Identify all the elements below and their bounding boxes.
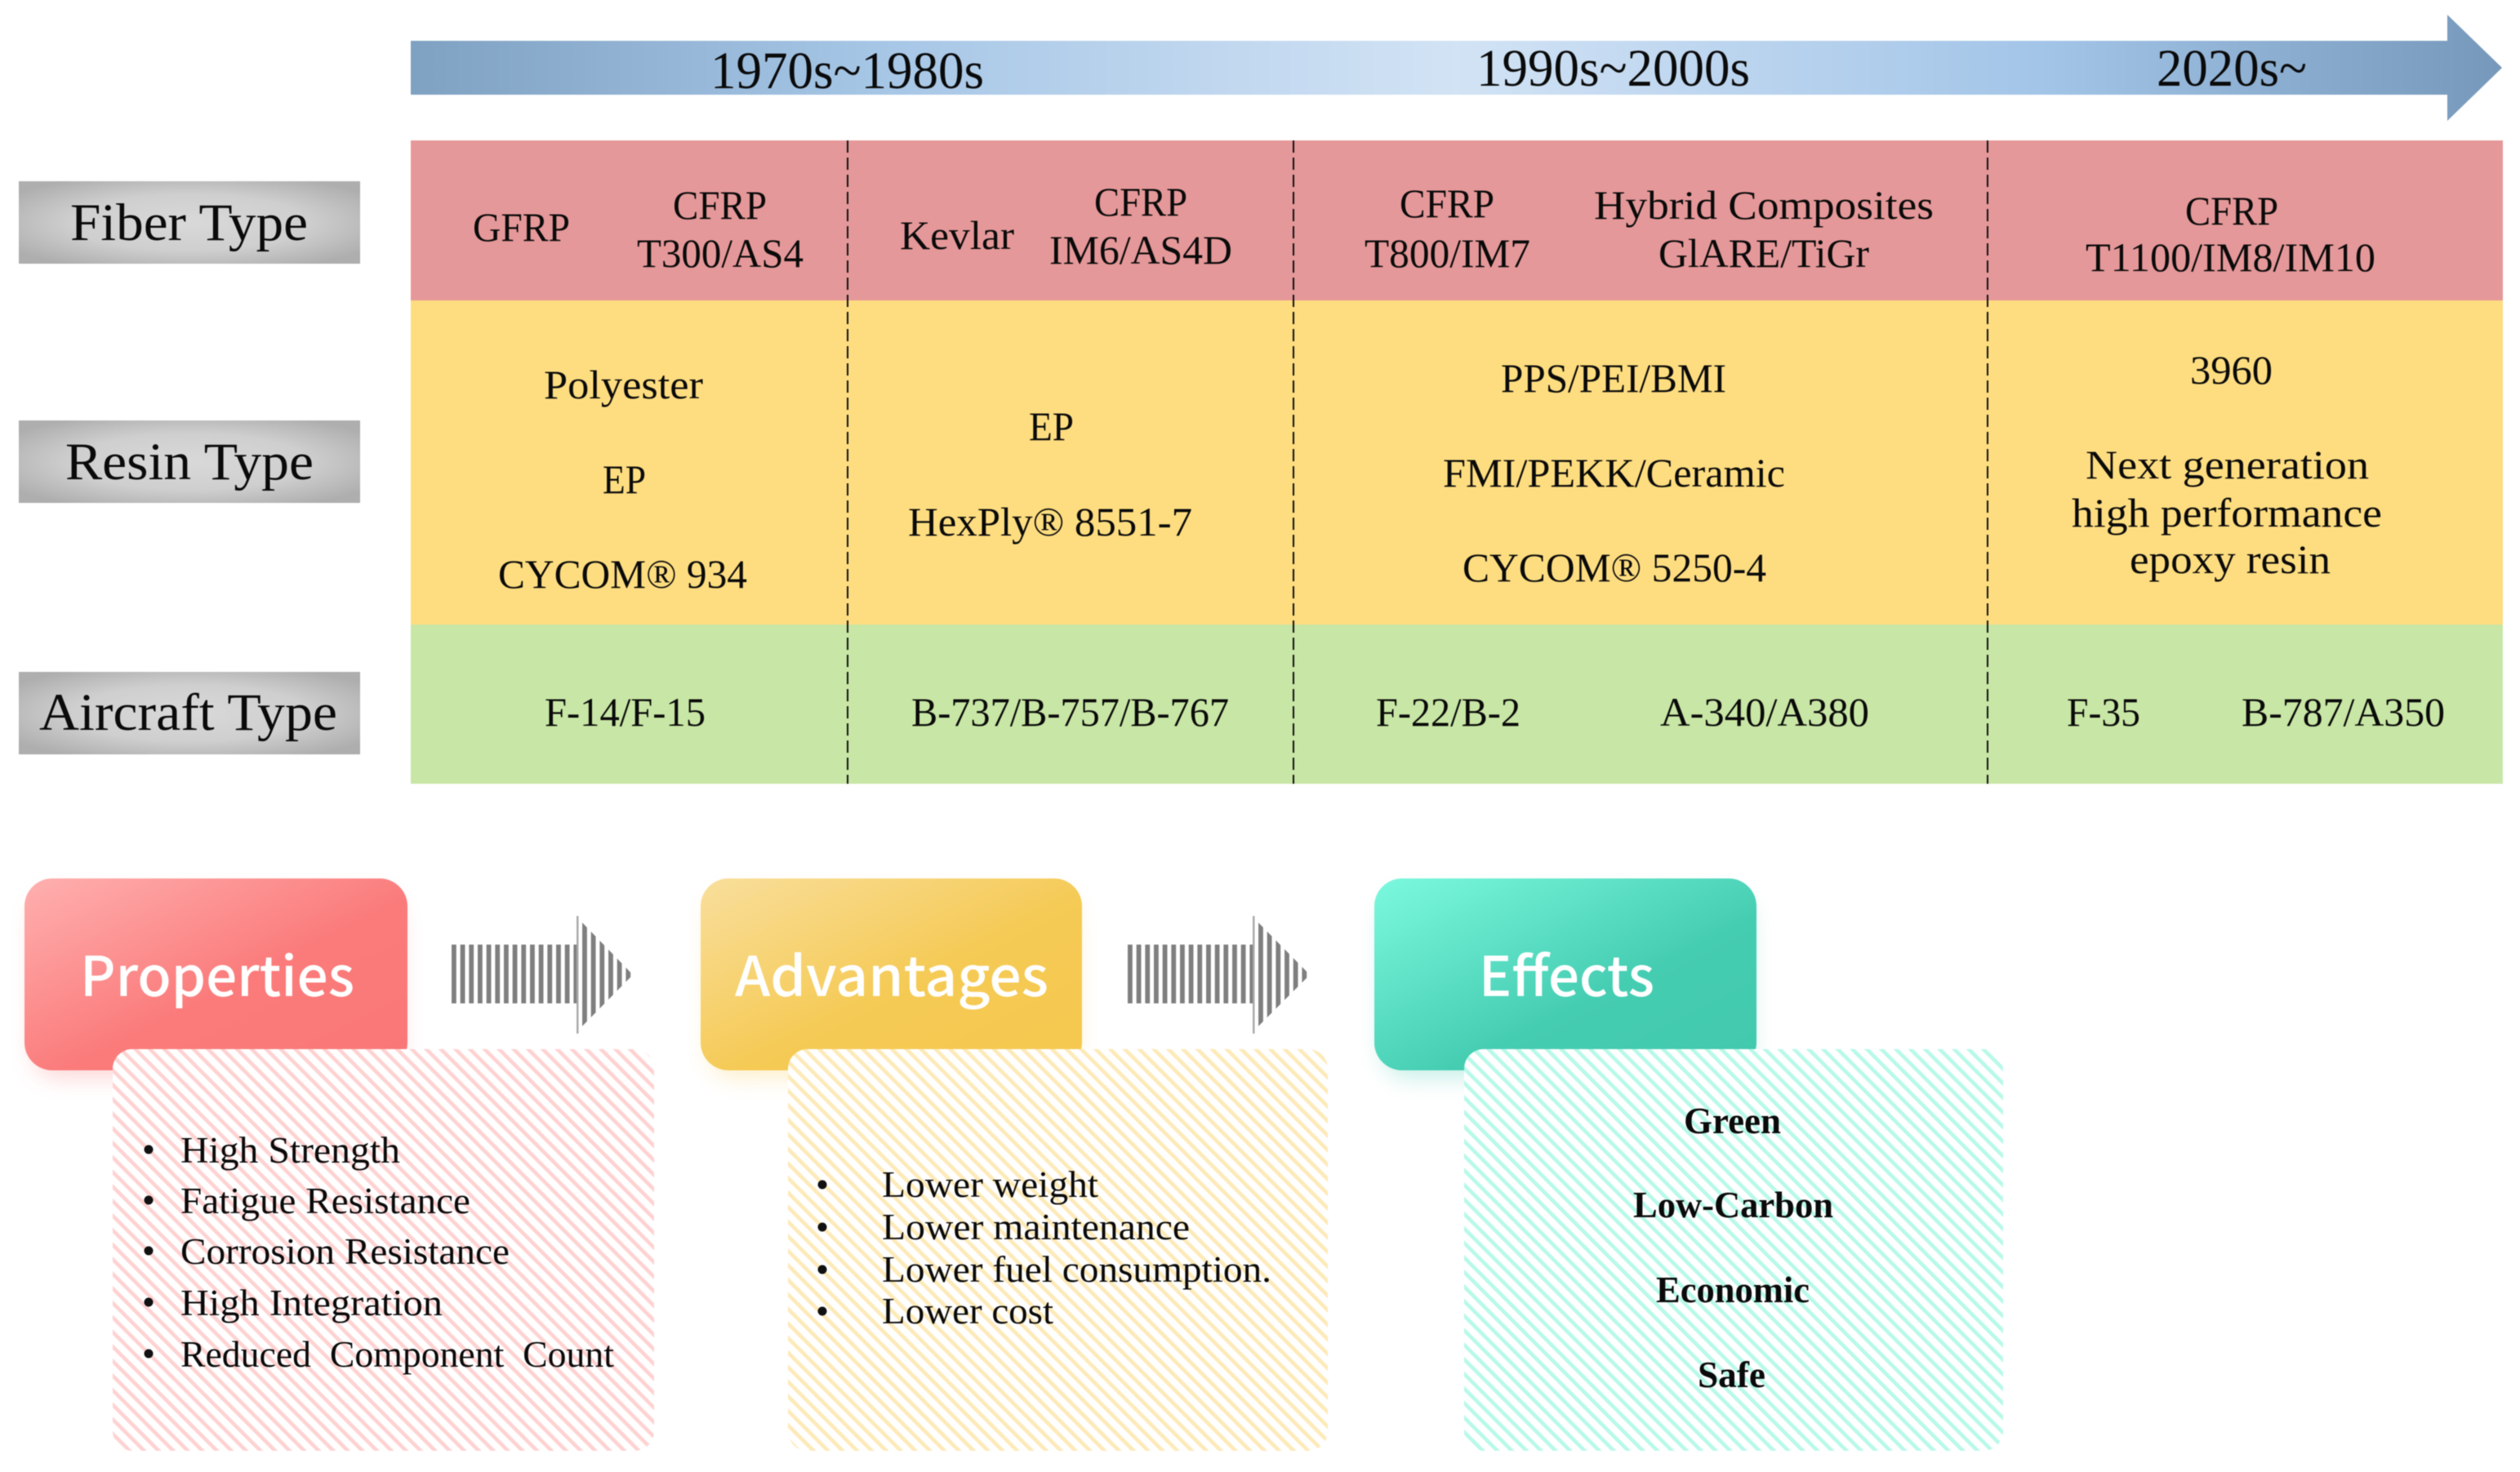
table row: resin type (411, 300, 2503, 625)
fiber entries 1990s~2000s: Hybrid Composites (1594, 182, 1934, 228)
period label: 2020s~: 2020s~ (2157, 39, 2307, 98)
advantages list panel: Lower weight (882, 1164, 1099, 1205)
resin entries 2020s (2072, 347, 2382, 582)
effects heading: Effects (1479, 933, 1654, 1012)
resin entries 1970s: CYCOM® 934 (498, 551, 747, 597)
advantages heading: Advantages (735, 933, 1049, 1012)
fiber entries 2020s: CFRP (2185, 188, 2278, 233)
advantages list panel: Lower fuel consumption. (882, 1249, 1271, 1290)
period label: 1990s~2000s: 1990s~2000s (1476, 39, 1750, 98)
resin entries 1980s (908, 403, 1192, 545)
properties list panel (113, 1049, 654, 1451)
fiber entries 1990s~2000s: GlARE/TiGr (1658, 230, 1869, 276)
row label: Fiber Type: Fiber Type (70, 193, 308, 252)
table row: aircraft type: B-737/B-757/B-767 (911, 689, 1229, 735)
resin entries 1970s: EP (603, 456, 646, 502)
fiber entries 1970s~1980s: GFRP (473, 204, 570, 250)
effects list panel: Economic (1656, 1270, 1810, 1310)
properties list panel: Reduced Component Count (180, 1334, 614, 1375)
resin entries 1990s~2000s: PPS/PEI/BMI (1501, 355, 1726, 401)
fiber entries 1970s~1980s: Kevlar (900, 212, 1014, 258)
row label: Fiber Type (19, 181, 360, 264)
fiber entries 1970s~1980s: IM6/AS4D (1049, 227, 1232, 273)
table row: aircraft type: A-340/A380 (1660, 689, 1869, 735)
resin entries 2020s: 3960 (2190, 347, 2273, 393)
fiber entries 1990s~2000s: CFRP (1400, 180, 1494, 226)
timeline arrow (411, 15, 2502, 121)
resin entries 2020s: epoxy resin (2130, 536, 2331, 582)
advantages card (701, 878, 1328, 1451)
row label: Aircraft Type: Aircraft Type (39, 683, 337, 742)
fiber entries 1970s~1980s (473, 179, 1232, 276)
resin entries 1970s: Polyester (544, 362, 703, 407)
effects list panel: Green (1684, 1101, 1781, 1141)
effects card (1374, 878, 2003, 1451)
properties heading: Properties (80, 933, 354, 1012)
advantages heading (701, 878, 1082, 1070)
advantages list panel (788, 1049, 1328, 1451)
resin entries 1970s (498, 362, 747, 597)
properties card (24, 878, 654, 1451)
properties list panel: Fatigue Resistance (180, 1181, 470, 1221)
effects list panel (1464, 1049, 2003, 1451)
properties heading (24, 878, 407, 1070)
effects list panel: Safe (1698, 1354, 1765, 1395)
fiber entries 1990s~2000s: T800/IM7 (1365, 230, 1530, 276)
era dividers (848, 140, 1988, 784)
table row: aircraft type: F-35 (2067, 689, 2140, 735)
advantages list panel: Lower cost (882, 1291, 1054, 1332)
row label: Resin Type: Resin Type (65, 433, 314, 491)
table row: aircraft type: F-22/B-2 (1376, 689, 1520, 735)
resin entries 1990s~2000s (1443, 355, 1785, 590)
arrow: advantages to effects (1127, 916, 1310, 1034)
table row: fiber type (411, 140, 2503, 300)
table row: aircraft type: B-787/A350 (2242, 689, 2445, 735)
fiber entries 1970s~1980s: CFRP (673, 182, 767, 228)
table row: aircraft type (411, 625, 2503, 784)
resin entries 1980s: EP (1029, 403, 1074, 449)
resin entries 2020s: Next generation (2086, 442, 2369, 487)
properties list panel: Corrosion Resistance (180, 1231, 510, 1272)
properties list panel: High Strength (180, 1130, 400, 1171)
resin entries 1990s~2000s: FMI/PEKK/Ceramic (1443, 450, 1785, 496)
properties list panel: High Integration (180, 1283, 443, 1323)
arrow: properties to advantages (451, 916, 633, 1034)
fiber entries 2020s (2086, 188, 2375, 280)
resin entries 1990s~2000s: CYCOM® 5250-4 (1463, 545, 1766, 590)
fiber entries 2020s: T1100/IM8/IM10 (2086, 234, 2375, 280)
period label: 1970s~1980s: 1970s~1980s (710, 42, 984, 100)
effects heading (1374, 878, 1756, 1070)
row label: Aircraft Type (19, 672, 360, 754)
resin entries 2020s: high performance (2072, 490, 2382, 536)
effects list panel: Low-Carbon (1633, 1185, 1833, 1225)
row label: Resin Type (19, 420, 360, 503)
advantages list panel: Lower maintenance (882, 1207, 1190, 1247)
table row: aircraft type: F-14/F-15 (545, 689, 706, 735)
fiber entries 1970s~1980s: CFRP (1094, 179, 1187, 225)
fiber entries 1970s~1980s: T300/AS4 (637, 230, 804, 276)
resin entries 1980s: HexPly® 8551-7 (908, 499, 1192, 545)
fiber entries 1990s~2000s (1365, 180, 1934, 276)
